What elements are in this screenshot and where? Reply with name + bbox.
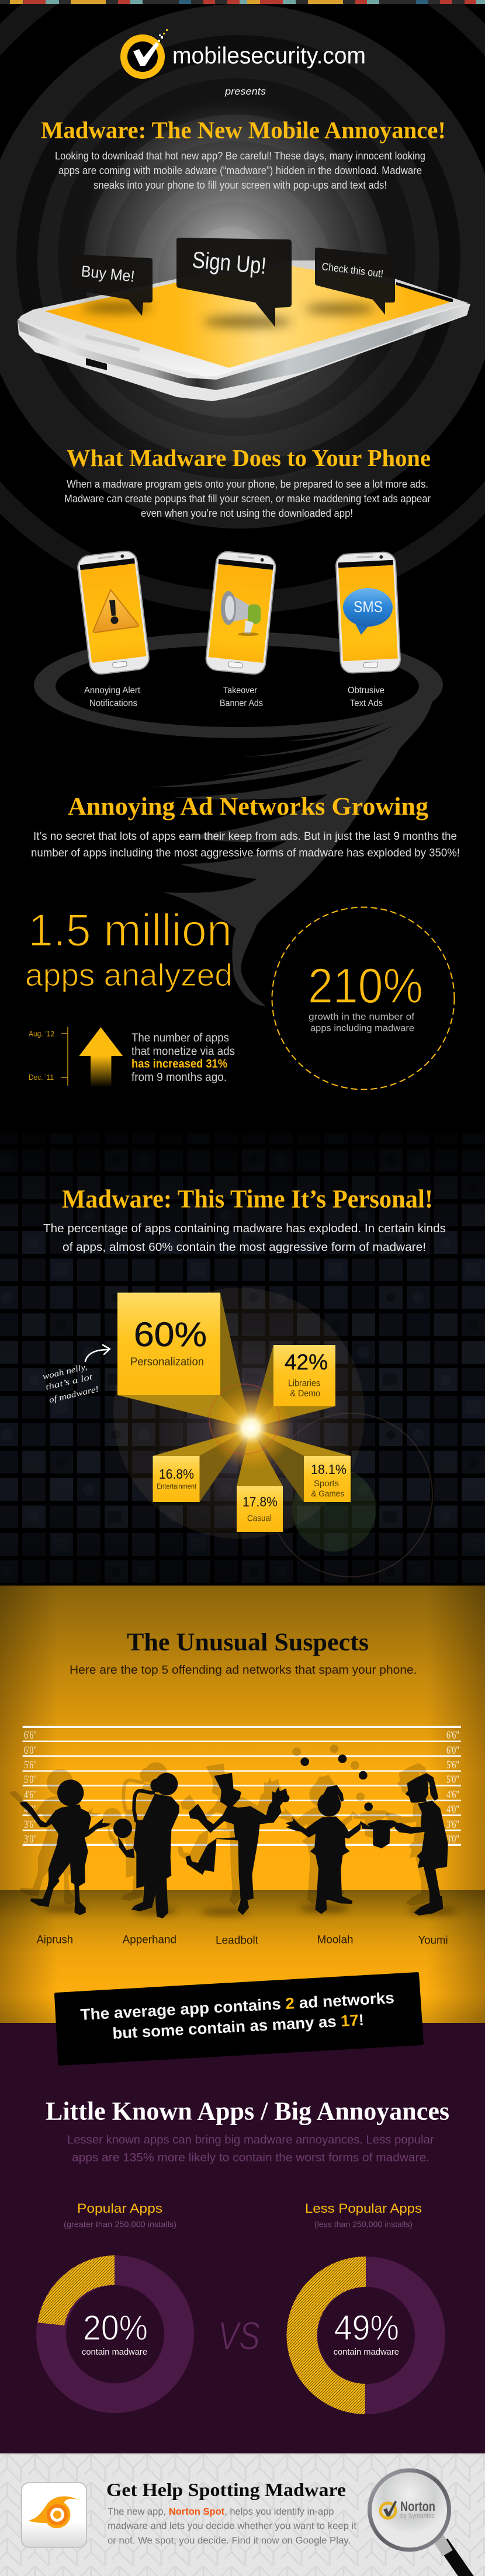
box: libraries and demo 42% xyxy=(273,1345,335,1406)
callout banner: average ad networks: The average app contains 2 ad networks xyxy=(80,1989,395,2024)
bubble: Check this out: Check this out! xyxy=(321,260,384,280)
box: personalization 60% xyxy=(117,1293,220,1395)
phone back shell xyxy=(18,304,470,401)
bubble: Buy Me xyxy=(68,254,153,316)
label: less popular apps: (less than 250,000 installs) xyxy=(314,2219,413,2229)
label: takeover banner ads: Takeover xyxy=(223,686,258,696)
text: monetize via ads xyxy=(131,1031,235,1084)
floor shadows xyxy=(44,1904,457,1916)
stat circle: 210 percent growth: 210% xyxy=(308,958,423,1013)
text: little known apps: apps are 135% more likely to contain the worst forms of madware. xyxy=(72,2151,429,2164)
top colour stripe xyxy=(0,0,485,4)
icon: magnifying glass with Norton logo: Norton xyxy=(400,2499,435,2515)
text: monetize via ads: The number of apps xyxy=(131,1031,229,1044)
heading: what madware does: What Madware Does to Your Phone xyxy=(67,444,431,471)
text: little known apps: Lesser known apps can bring big madware annoyances. Less popular xyxy=(67,2134,434,2147)
height chart lines: 4'6" xyxy=(446,1789,459,1801)
handwritten note with arrow: woah nelly, xyxy=(41,1362,88,1382)
suspect names: Moolah xyxy=(317,1934,353,1946)
height chart lines: 6'0" xyxy=(24,1744,37,1757)
heading: little known apps: Little Known Apps / Big Annoyances xyxy=(46,2097,449,2126)
stat: 1.5 million apps analyzed xyxy=(25,904,233,993)
text: this time it's personal xyxy=(43,1222,446,1254)
text: this time it's personal: of apps, almost 60% contain the most aggressive form of madware! xyxy=(63,1240,426,1254)
ray shadows xyxy=(117,1293,351,1502)
box: entertainment 16.8% xyxy=(153,1456,200,1502)
text: monetize via ads: has increased 31% xyxy=(131,1058,227,1070)
box: sports and games 18.1%: 18.1% xyxy=(311,1462,347,1477)
text: norton spot description: The new app, Norton Spot, helps you identify in-app xyxy=(108,2506,334,2517)
text: what madware does: When a madware program gets onto your phone, be prepared to see a lot more ads. xyxy=(67,478,428,490)
intro text xyxy=(55,150,425,191)
text: annoying ad networks xyxy=(31,830,460,860)
height chart lines xyxy=(23,1726,461,1846)
height chart lines: 5'6" xyxy=(446,1759,459,1771)
donut chart: popular apps 20%: contain madware xyxy=(82,2347,147,2357)
text: annoying ad networks: It’s no secret that lots of apps earn their keep from ads. But in just the last 9 months the xyxy=(33,830,457,843)
panel: unusual suspects backdrop xyxy=(0,1586,485,2030)
icon wall background xyxy=(0,1104,485,1586)
text: little known apps xyxy=(67,2134,434,2164)
text: what madware does: even when you’re not using the downloaded app! xyxy=(141,507,353,519)
suspect names: Leadbolt xyxy=(216,1935,259,1947)
donut chart: popular apps 20% xyxy=(38,2255,179,2398)
height chart lines: 4'6" xyxy=(24,1789,37,1801)
intro text: sneaks into your phone to fill your screen with pop-ups and text ads! xyxy=(93,179,387,191)
home button xyxy=(88,337,138,349)
height chart lines: 5'0" xyxy=(446,1774,459,1786)
icon: magnifying glass with Norton logo: by Symantec xyxy=(400,2512,435,2520)
box: casual 17.8% xyxy=(237,1486,283,1532)
box: libraries and demo 42%: 42% xyxy=(285,1350,328,1374)
tornado funnel xyxy=(34,632,443,1006)
box: sports and games 18.1%: & Games xyxy=(311,1489,344,1499)
phone: takeover banner ads xyxy=(205,551,276,675)
donut chart: less popular apps 49%: contain madware xyxy=(334,2347,399,2357)
label: less popular apps: Less Popular Apps xyxy=(305,2201,422,2216)
bubble: Check this out xyxy=(315,248,395,315)
suspect names: Apperhand xyxy=(123,1934,176,1946)
height chart lines: 4'0" xyxy=(446,1803,459,1816)
phone screen xyxy=(45,266,453,368)
box: casual 17.8%: 17.8% xyxy=(243,1494,278,1509)
lens flare xyxy=(113,1288,432,1577)
heading: this time it's personal: Madware: This Time It’s Personal! xyxy=(62,1185,433,1214)
label: popular apps xyxy=(64,2201,176,2229)
donut chart: popular apps 20%: 20% xyxy=(83,2308,148,2348)
heading: get help: Get Help Spotting Madware xyxy=(106,2479,346,2500)
height chart lines: 6'6" xyxy=(446,1729,459,1741)
text: what madware does: Madware can create popups that fill your screen, or make maddening text ads appear xyxy=(64,493,431,505)
intro text: Looking to download that hot new app? Be careful! These days, many innocent looking xyxy=(55,150,425,162)
bubble shadows xyxy=(82,303,375,328)
callout banner: average ad networks xyxy=(54,1972,424,2066)
label: annoying alert notifications xyxy=(84,686,141,708)
icon: megaphone xyxy=(221,591,261,636)
bubble: Buy Me: Buy Me! xyxy=(80,262,136,286)
icon: SMS bubble xyxy=(343,588,393,635)
side button xyxy=(414,325,430,332)
box: entertainment 16.8%: 16.8% xyxy=(159,1466,194,1482)
label: less popular apps xyxy=(305,2201,422,2229)
label: obtrusive text ads: Obtrusive xyxy=(348,686,384,696)
silhouette: Youmi xyxy=(385,1763,448,1916)
label: annoying alert notifications: Notifications xyxy=(89,698,137,708)
callout banner: average ad networks: but some contain as many as 17! xyxy=(112,2011,365,2042)
silhouette: Moolah xyxy=(277,1744,399,1914)
panel: little known apps background xyxy=(0,2023,485,2454)
burst chart of madware by category xyxy=(117,1293,351,1532)
height chart lines: 3'0" xyxy=(446,1833,459,1845)
stat: 1.5 million apps analyzed: apps analyzed xyxy=(25,958,233,993)
height chart lines: 3'6" xyxy=(446,1819,459,1831)
label: takeover banner ads xyxy=(220,686,263,708)
icon: Norton Spot app xyxy=(22,2483,86,2547)
usb port xyxy=(86,358,107,370)
handwritten note with arrow xyxy=(41,1345,110,1405)
height chart lines: 5'6" xyxy=(24,1759,37,1771)
logo: mobilesecurity.com: mobilesecurity.com xyxy=(172,43,366,69)
timeline scale: Dec. ’11 xyxy=(29,1073,54,1082)
height chart lines: 3'6" xyxy=(24,1819,37,1831)
text: what madware does xyxy=(64,478,431,519)
suspect names xyxy=(36,1934,448,1947)
suspect names: Aiprush xyxy=(36,1934,73,1946)
donut chart: less popular apps 49% xyxy=(286,2257,430,2414)
silhouette: Aiprush xyxy=(10,1769,111,1915)
phone bezel xyxy=(18,260,469,377)
height chart lines: 4'0" xyxy=(24,1803,37,1816)
silhouette: Leadbolt xyxy=(178,1764,289,1915)
height chart lines: 6'6" xyxy=(24,1729,37,1741)
stat: 1.5 million apps analyzed: 1.5 million xyxy=(28,904,232,955)
light burst xyxy=(209,1386,293,1470)
bubble: Sign Up: Sign Up! xyxy=(191,247,268,279)
icon: warning triangle xyxy=(93,590,138,632)
label: popular apps: Popular Apps xyxy=(77,2201,162,2216)
panel: footer xyxy=(0,2453,485,2576)
phone: obtrusive text ads xyxy=(335,552,401,673)
concentric ring background xyxy=(0,0,485,613)
vs label: VS xyxy=(218,2314,260,2358)
stat circle: 210 percent growth xyxy=(272,908,455,1090)
text: this time it's personal: The percentage of apps containing madware has exploded. In certain kinds xyxy=(43,1222,446,1235)
text: annoying ad networks: number of apps including the most aggressive forms of madware has exploded by 350%! xyxy=(31,847,460,860)
box: libraries and demo 42%: & Demo xyxy=(290,1389,320,1399)
height chart lines: 5'0" xyxy=(24,1774,37,1786)
box: libraries and demo 42%: Libraries xyxy=(288,1378,320,1389)
phone: annoying alert notifications xyxy=(77,550,150,675)
suspect names: Youmi xyxy=(418,1935,448,1947)
bubble: Sign Up xyxy=(176,238,292,327)
box: sports and games 18.1% xyxy=(304,1456,351,1502)
timeline scale: Aug. ’12 xyxy=(29,1029,54,1038)
donut chart: less popular apps 49%: 49% xyxy=(334,2308,399,2348)
box: casual 17.8%: Casual xyxy=(247,1514,272,1524)
height chart lines: 3'0" xyxy=(24,1833,37,1845)
box: personalization 60%: 60% xyxy=(134,1316,207,1354)
label: takeover banner ads: Banner Ads xyxy=(220,698,263,708)
text: unusual suspects: Here are the top 5 offending ad networks that spam your phone. xyxy=(70,1664,417,1677)
text: norton spot description: or not. We spot, you decide. Find it now on Google Play. xyxy=(108,2535,351,2546)
silhouette: Apperhand xyxy=(103,1762,179,1918)
page background xyxy=(0,0,485,1133)
presents label: presents xyxy=(224,86,266,97)
box: personalization 60%: Personalization xyxy=(130,1356,204,1368)
handwritten note with arrow: of madware! xyxy=(48,1385,100,1405)
handwritten note with arrow: that’s a lot xyxy=(44,1372,94,1392)
text: norton spot description xyxy=(108,2506,356,2546)
intro text: apps are coming with mobile adware (“madware”) hidden in the download. Madware xyxy=(58,165,422,176)
box: sports and games 18.1%: Sports xyxy=(314,1479,339,1489)
status bar xyxy=(396,282,453,302)
icon: magnifying glass with Norton logo xyxy=(369,2470,485,2576)
text: norton spot description: madware and lets you decide whether you want to keep it xyxy=(108,2521,356,2532)
label: popular apps: (greater than 250,000 installs) xyxy=(64,2219,176,2229)
label: annoying alert notifications: Annoying Alert xyxy=(84,686,141,696)
title: Madware: The New Mobile Annoyance! xyxy=(41,117,446,144)
label: obtrusive text ads xyxy=(348,686,384,708)
heading: annoying ad networks: Annoying Ad Networks Growing xyxy=(68,793,429,821)
text: monetize via ads: that monetize via ads xyxy=(131,1045,235,1058)
heading: the unusual suspects: The Unusual Suspects xyxy=(127,1629,369,1656)
height chart lines: 6'0" xyxy=(446,1744,459,1757)
stat circle: 210 percent growth: apps including madware xyxy=(310,1023,414,1034)
logo: mobilesecurity.com xyxy=(124,29,366,75)
phone chrome band xyxy=(18,304,469,390)
label: obtrusive text ads: Text Ads xyxy=(350,698,383,708)
box: entertainment 16.8%: Entertainment xyxy=(157,1483,197,1490)
arrow: up xyxy=(79,1027,123,1087)
timeline scale xyxy=(29,1027,68,1086)
stat circle: 210 percent growth: growth in the number of xyxy=(309,1012,415,1022)
icon: SMS bubble: SMS xyxy=(354,598,383,616)
hero phone with ad bubbles xyxy=(18,238,470,401)
text: monetize via ads: from 9 months ago. xyxy=(131,1071,227,1084)
